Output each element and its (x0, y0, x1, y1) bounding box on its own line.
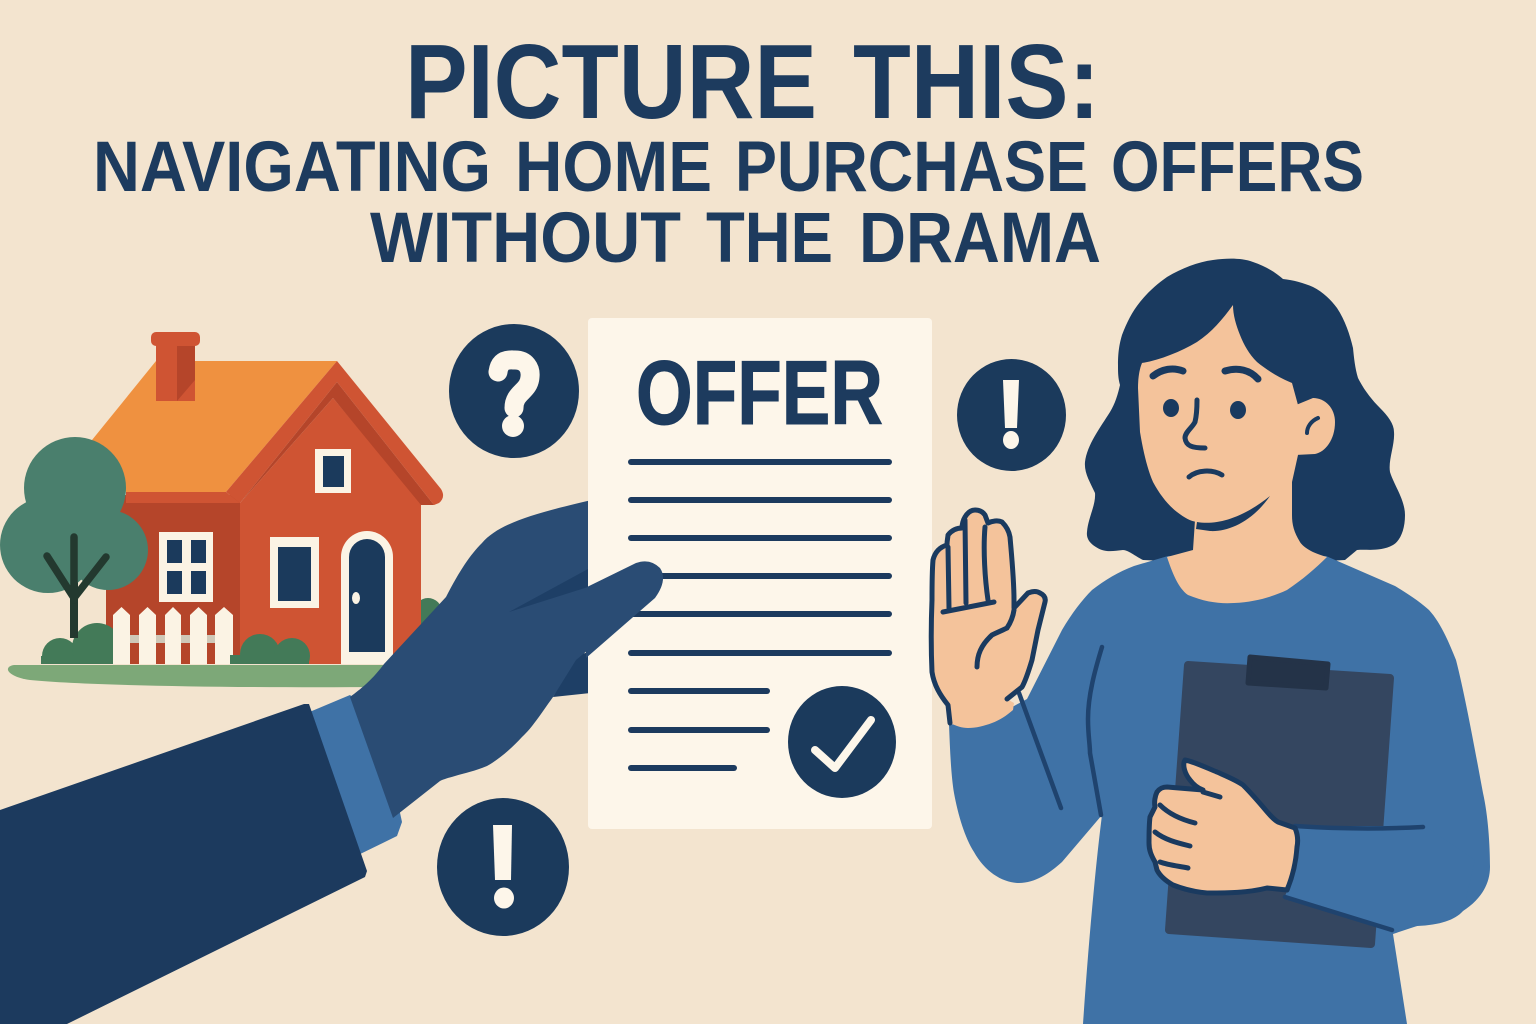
exclamation badge lower (437, 798, 569, 936)
woman (931, 259, 1490, 1024)
forearm lines (1285, 826, 1423, 930)
title (93, 23, 1364, 278)
title line 3: WITHOUT (370, 199, 681, 278)
bush behind house (414, 598, 442, 626)
front window (270, 537, 319, 608)
sleeve cuff (300, 695, 402, 858)
offer heading: OFFER (636, 343, 883, 444)
side window (159, 532, 213, 602)
clipboard (1169, 657, 1390, 944)
title line 2: HOME (515, 128, 712, 207)
title line 3 (370, 199, 1101, 278)
eave band (126, 492, 240, 503)
house illustration (0, 332, 443, 687)
title line 2: NAVIGATING (93, 128, 491, 207)
gable trim (226, 361, 443, 505)
title line 1: THIS: (853, 23, 1100, 141)
attic window (315, 449, 351, 493)
title line 2 (93, 128, 1364, 207)
question mark badge (449, 324, 579, 458)
sweater fold lines (1019, 647, 1102, 815)
eyebrows (1153, 369, 1258, 379)
agent arm and hand (0, 498, 600, 1024)
title line 2: PURCHASE (735, 128, 1088, 207)
hair (1085, 259, 1405, 565)
text lines (631, 462, 889, 768)
gable front wall (240, 398, 421, 664)
title line 1: PICTURE (405, 23, 817, 141)
ground (8, 665, 385, 687)
picket fence (113, 607, 233, 664)
hand (350, 498, 600, 818)
nose (1185, 400, 1205, 448)
gable trim shadow (240, 382, 434, 505)
title line 1 (405, 23, 1100, 141)
exclamation badge right (957, 359, 1066, 471)
offer document (588, 318, 932, 829)
title line 3: THE (706, 199, 833, 278)
chimney (151, 332, 200, 401)
right bush (230, 634, 310, 664)
raised hand (931, 510, 1045, 728)
title line 3: DRAMA (859, 199, 1101, 278)
door (341, 531, 393, 664)
fingers behind document (553, 650, 600, 697)
side wall (106, 495, 240, 664)
orange roof (92, 361, 337, 492)
title line 2: OFFERS (1111, 128, 1364, 207)
sweater (949, 556, 1490, 1024)
face (1138, 305, 1298, 524)
mouth (1189, 471, 1222, 477)
tree (0, 437, 148, 638)
eyes (1163, 399, 1246, 419)
left bush (41, 623, 113, 664)
forearm (1285, 826, 1475, 931)
ear (1295, 398, 1335, 455)
holding hand (1149, 760, 1298, 893)
agent thumb (509, 561, 663, 658)
jacket sleeve (0, 704, 367, 1024)
check badge (788, 686, 896, 798)
paper (588, 318, 932, 829)
neck (1167, 472, 1327, 603)
jaw line (1196, 496, 1270, 531)
